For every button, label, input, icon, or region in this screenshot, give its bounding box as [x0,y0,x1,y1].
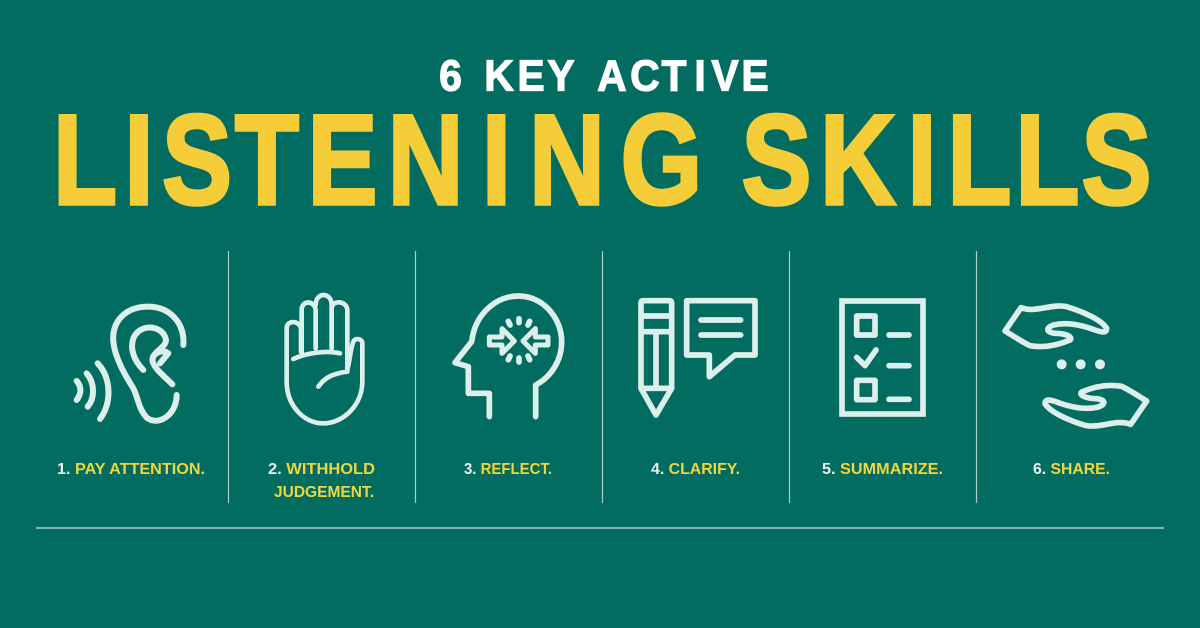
label: summarize: 5. SUMMARIZE. [822,461,943,478]
heading: listening skills: LISTENING SKILLS [53,88,1152,231]
icon: pencil and speech bubble [641,301,755,415]
icon: ear with sound waves [77,307,183,421]
title: 6 key active: 6 KEY ACTIVE [439,52,769,101]
label: withhold judgement: JUDGEMENT. [274,484,374,501]
label: pay attention: 1. PAY ATTENTION. [57,461,205,478]
label: withhold judgement [268,461,375,501]
icon: sharing hands [1005,306,1147,426]
label: withhold judgement: 2. WITHHOLD [268,461,375,478]
label: clarify: 4. CLARIFY. [651,461,740,478]
label: reflect: 3. REFLECT. [464,461,552,478]
icon: head with converging arrows [455,296,562,417]
label: share: 6. SHARE. [1033,461,1110,478]
icon: raised hand [287,295,362,423]
icon: checklist [842,301,923,414]
